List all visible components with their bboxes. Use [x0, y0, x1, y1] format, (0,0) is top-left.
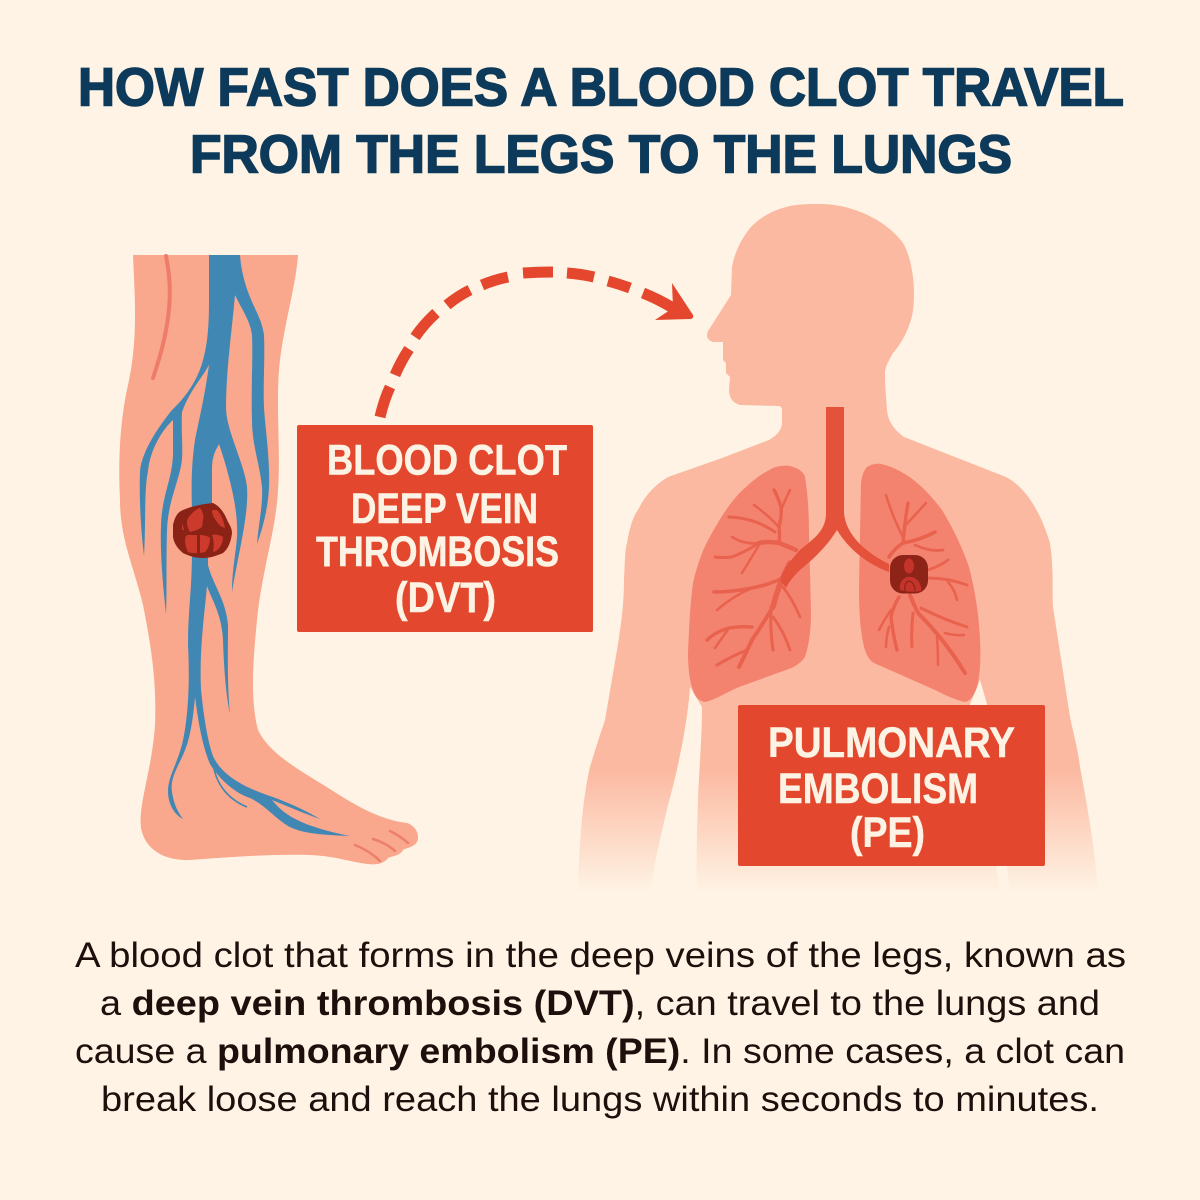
- label: blood clot deep vein thrombosis: [297, 425, 593, 632]
- lung left: [688, 466, 811, 702]
- illustration: body with lungs and pulmonary embolism: [578, 204, 1098, 892]
- upper veins: [140, 255, 269, 614]
- label: blood clot deep vein thrombosis: DEEP VEIN: [351, 485, 538, 533]
- illustration: leg with deep vein thrombosis: [119, 255, 418, 864]
- body silhouette: [578, 204, 1098, 892]
- blood clot in lung: [890, 555, 928, 594]
- leg silhouette: [119, 255, 418, 864]
- description text: a deep vein thrombosis (DVT) , can travel to the lungs and: [100, 984, 1100, 1023]
- gap between left arm and torso: [650, 687, 702, 892]
- label: pulmonary embolism: EMBOLISM: [778, 765, 978, 813]
- title: FROM THE LEGS TO THE LUNGS: [190, 124, 1012, 184]
- right lung branches: [879, 495, 967, 673]
- label: blood clot deep vein thrombosis: (DVT): [395, 574, 496, 622]
- arrow: dashed path from leg to lungs: [380, 272, 693, 417]
- description text: cause a pulmonary embolism (PE) . In some cases, a clot can: [75, 1032, 1125, 1071]
- lower veins: [168, 550, 350, 836]
- label: blood clot deep vein thrombosis: THROMBOSIS: [316, 528, 559, 576]
- title: [78, 58, 1124, 184]
- trachea and bronchi: [780, 407, 889, 588]
- blood clot in leg: [173, 503, 232, 558]
- toe creases: [355, 831, 408, 861]
- small foot vein: [213, 760, 247, 807]
- label: pulmonary embolism: [738, 705, 1045, 866]
- left lung branches: [707, 490, 800, 667]
- lung right: [859, 464, 980, 702]
- description text: break loose and reach the lungs within seconds to minutes.: [101, 1080, 1099, 1119]
- description text: A blood clot that forms in the deep veins of the legs, known as: [75, 936, 1126, 975]
- label: blood clot deep vein thrombosis: BLOOD CLOT: [327, 436, 567, 484]
- artery line on thigh: [153, 256, 170, 378]
- label: pulmonary embolism: (PE): [850, 809, 925, 857]
- label: pulmonary embolism: PULMONARY: [768, 719, 1015, 767]
- gap between right arm and torso: [970, 680, 1010, 892]
- description text: [75, 936, 1126, 1119]
- title: HOW FAST DOES A BLOOD CLOT TRAVEL: [78, 58, 1124, 118]
